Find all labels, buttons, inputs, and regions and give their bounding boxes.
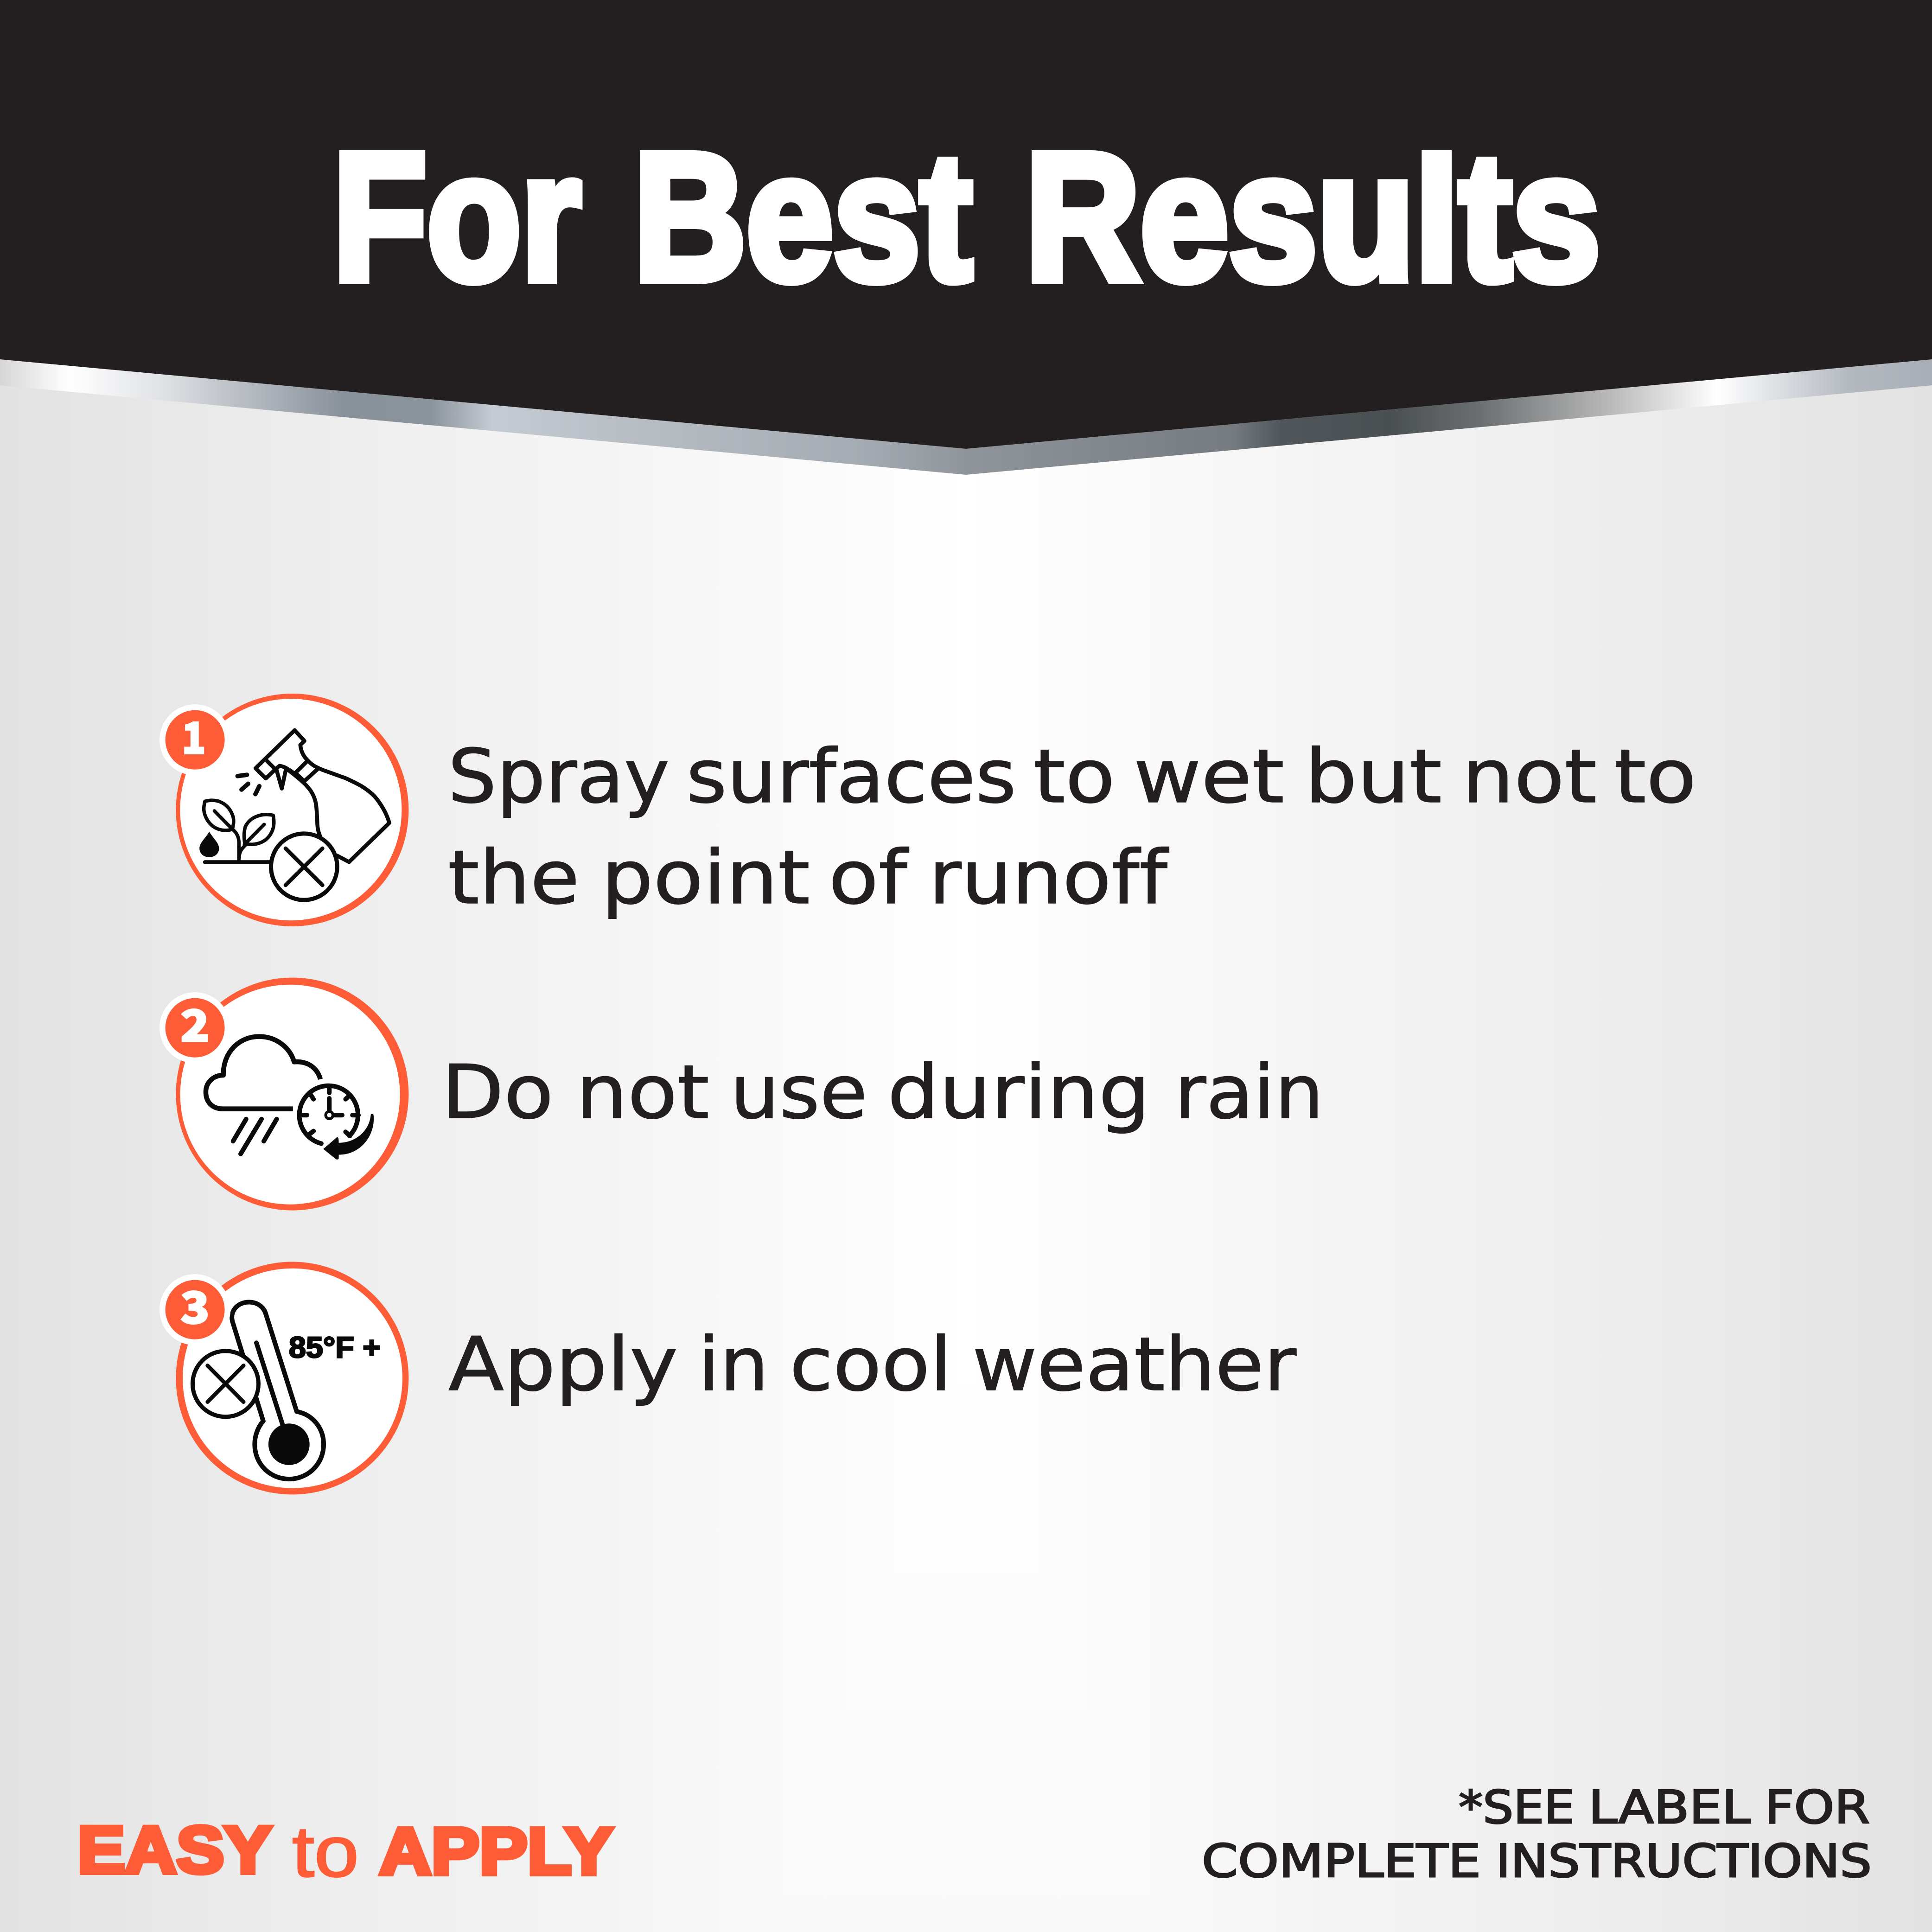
see label note: INSTRUCTIONS	[1496, 1835, 1872, 1888]
step 1 text: of	[829, 834, 909, 921]
metallic chevron band	[0, 359, 1932, 475]
step 1 text: runoff	[929, 834, 1169, 921]
step 2 text: not	[576, 1049, 709, 1135]
step 1 text: not	[1462, 733, 1597, 820]
see label note: FOR	[1765, 1781, 1870, 1834]
step 2 text: rain	[1174, 1049, 1324, 1135]
step 1 text: the	[448, 834, 580, 921]
title: Best	[633, 115, 972, 318]
step 1 text: Spray	[448, 733, 670, 820]
easy to apply tagline: APPLY	[379, 1815, 613, 1888]
title: For	[333, 115, 581, 318]
number badge 1: 1	[182, 704, 206, 767]
step 1 text: point	[601, 834, 810, 921]
see label note: LABEL	[1588, 1781, 1751, 1834]
step 1 text: wet	[1134, 733, 1284, 820]
step 3 icon	[159, 1262, 408, 1494]
step 3 text: cool	[790, 1321, 952, 1408]
step 1 icon	[159, 694, 408, 926]
see label note: *SEE	[1459, 1781, 1575, 1834]
step 2 icon	[159, 978, 408, 1211]
easy to apply tagline: EASY	[77, 1813, 272, 1887]
step 2 text: use	[730, 1049, 867, 1135]
step 1 text: surfaces	[686, 733, 1016, 820]
step 3 text: Apply	[448, 1321, 678, 1408]
temperature label: 85°F +	[289, 1331, 381, 1364]
step 2 text: Do	[441, 1049, 554, 1135]
header banner	[0, 0, 1932, 449]
see label note: COMPLETE	[1202, 1835, 1481, 1888]
number badge 3	[159, 1273, 230, 1345]
icon: rain cloud and clock	[206, 1037, 374, 1160]
step 3 text: weather	[972, 1321, 1296, 1408]
step 3 text: in	[698, 1321, 769, 1408]
easy to apply tagline	[77, 1811, 613, 1892]
number badge 2	[159, 991, 230, 1063]
easy to apply tagline: to	[292, 1811, 359, 1892]
icon: spray bottle and plant	[199, 730, 389, 900]
number badge 2: 2	[180, 991, 210, 1054]
step 1 text: but	[1305, 733, 1442, 820]
step 1 text: to	[1614, 733, 1696, 820]
step 2 text: during	[887, 1049, 1150, 1135]
icon: thermometer	[192, 1302, 324, 1479]
title: Results	[1025, 115, 1600, 318]
number badge 1	[159, 704, 230, 775]
step 1 text: to	[1033, 733, 1115, 820]
number badge 3: 3	[180, 1273, 210, 1336]
